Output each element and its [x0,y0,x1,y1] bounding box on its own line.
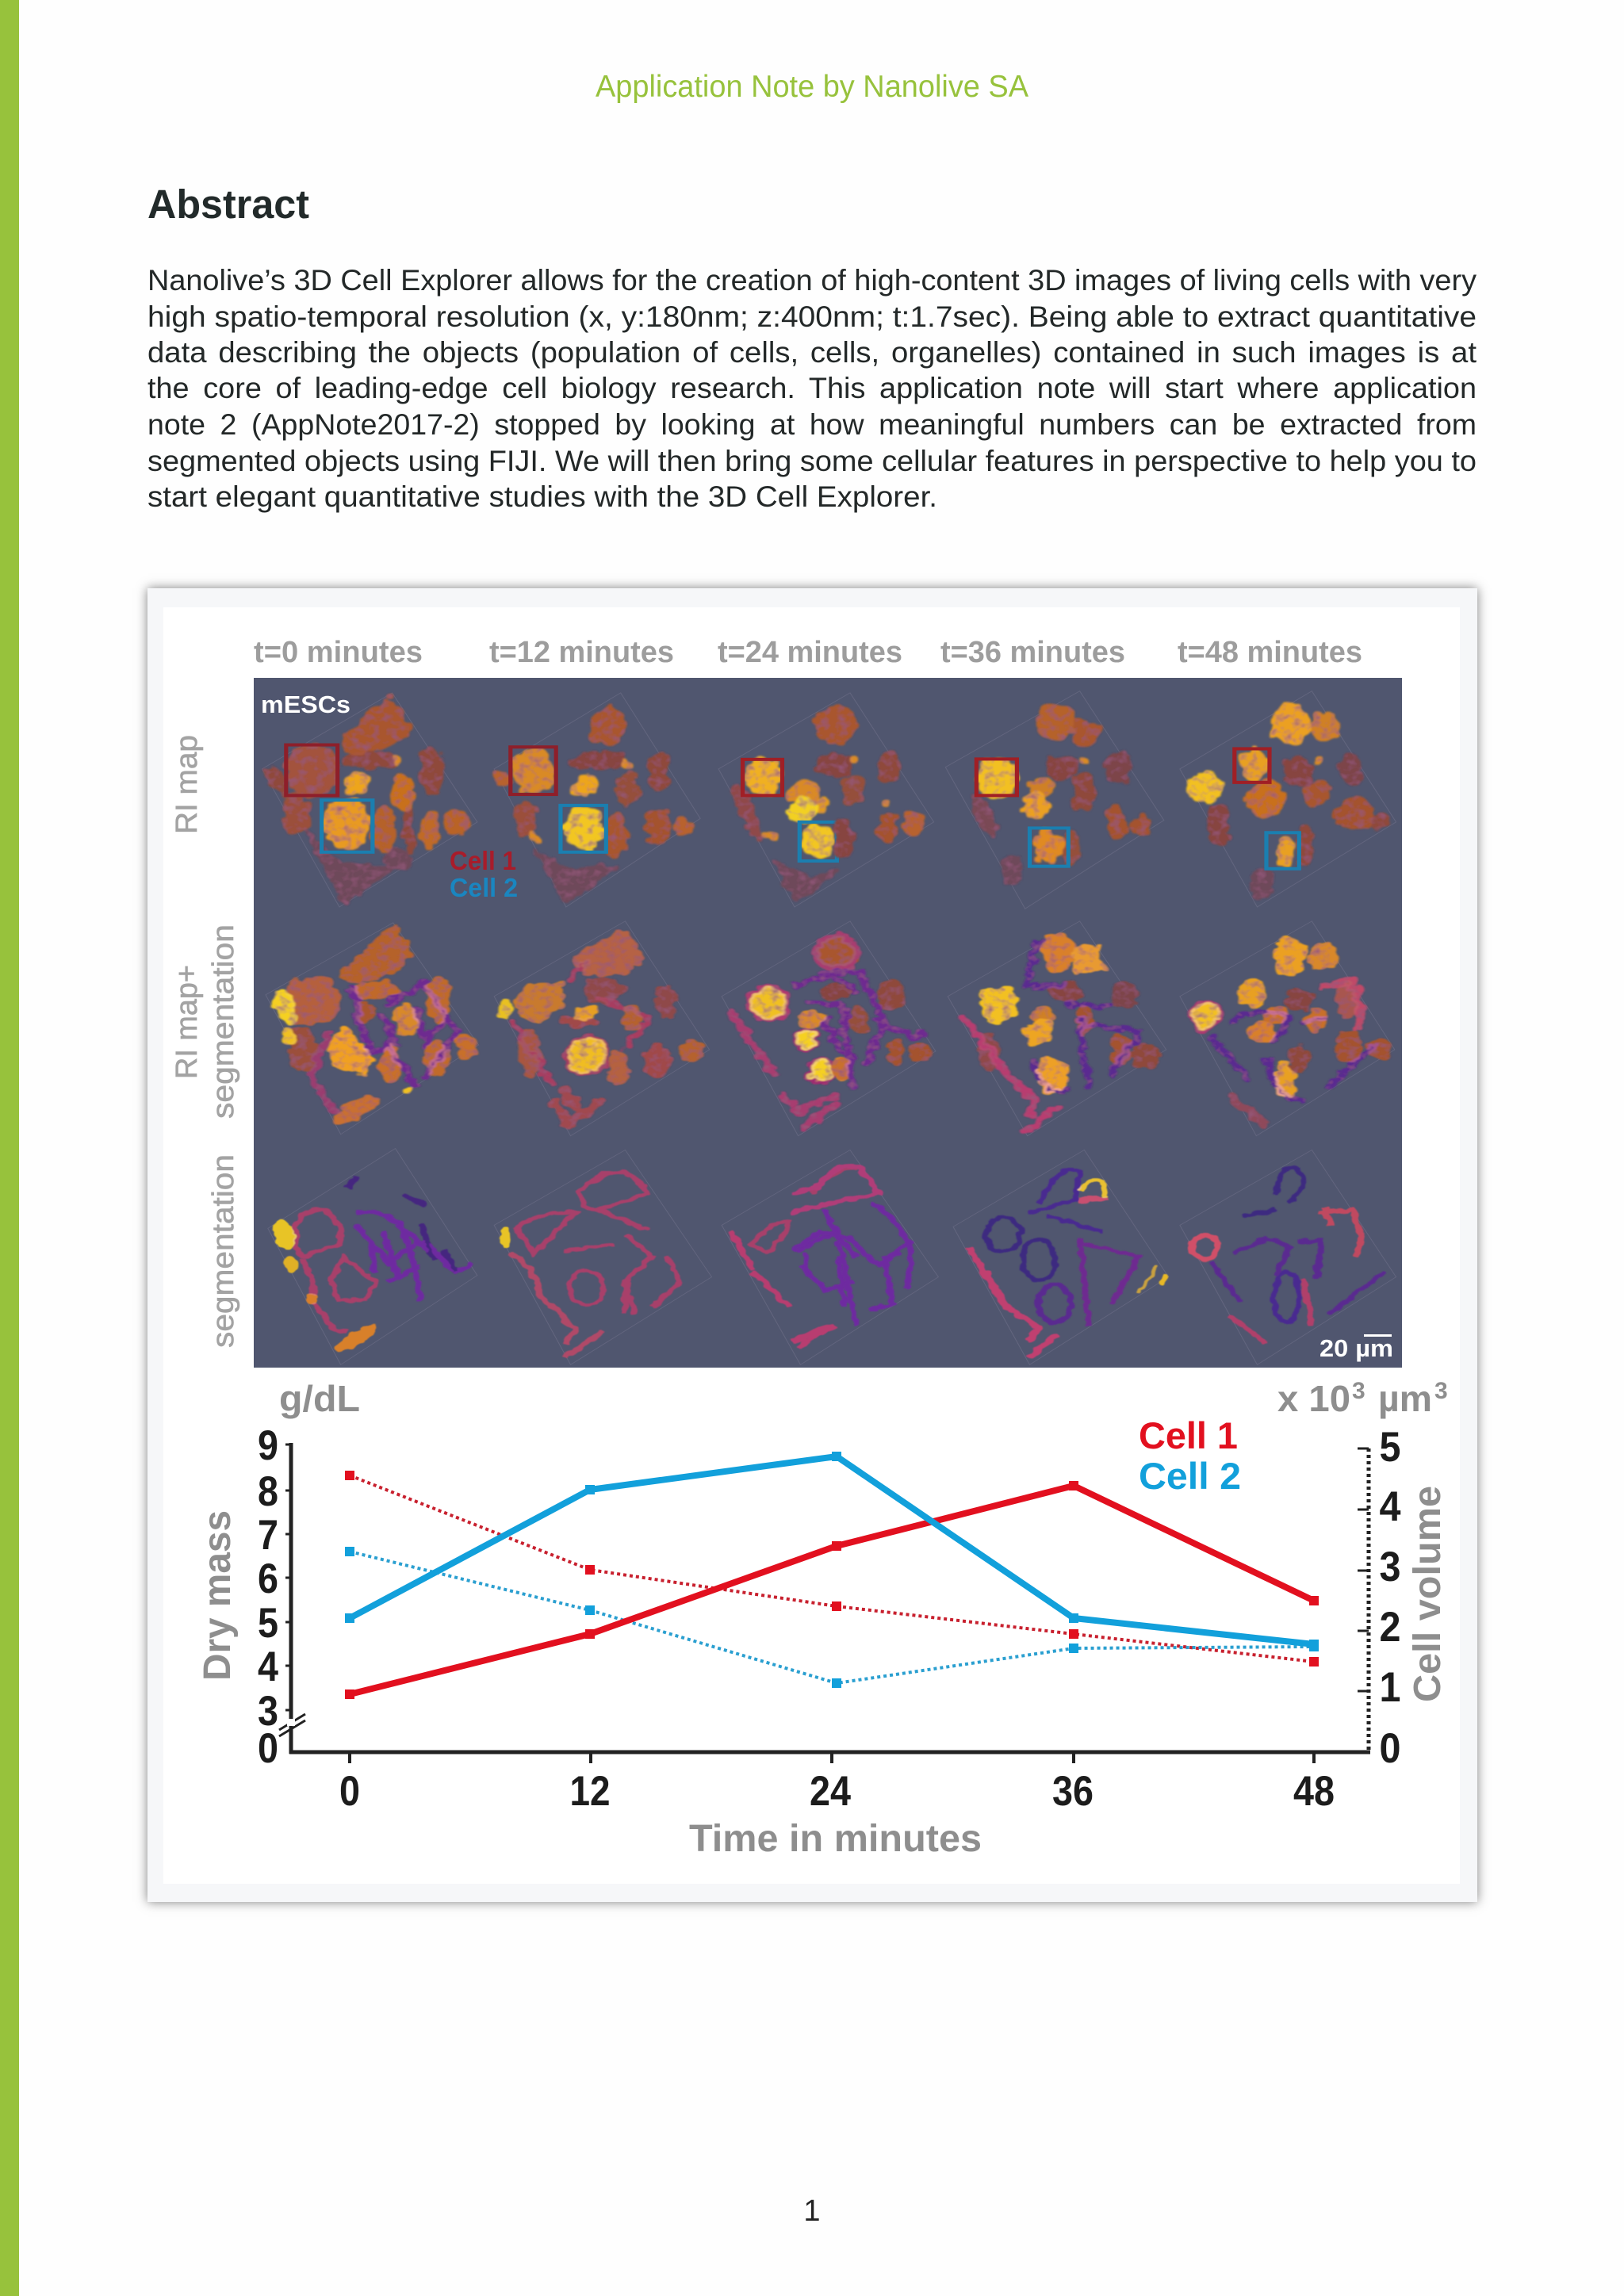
left axis numbers: 6 [258,1556,278,1602]
left axis title: Dry mass [197,1510,239,1681]
tile t=48 RI map [1180,691,1396,907]
right axis numbers: 4 [1380,1483,1401,1530]
column headings: t=36 minutes [940,636,1125,669]
x axis numbers: 48 [1293,1768,1335,1815]
tile t=24 segmentation [722,1150,938,1364]
row 2: RI map plus segmentation tiles [266,921,1395,1136]
tile t=12 segmentation [494,1150,712,1364]
left axis numbers: 8 [258,1468,278,1515]
scale bar: 20 µm [1320,1334,1393,1362]
chart legend: Cell 2 [1139,1455,1241,1497]
abstract body text: data describing the objects (population of cells, cells, organelles) contained in such images is at [147,336,1477,369]
abstract heading: Abstract [147,182,309,227]
column headings: t=24 minutes [718,636,902,669]
tile t=0 RI map [262,693,477,907]
row 1: RI map tiles [262,691,1396,909]
image legend: cell labels [450,846,518,902]
green side bar [0,0,19,2296]
left axis numbers: 7 [258,1512,278,1559]
left axis numbers: 4 [258,1644,278,1690]
line chart [197,1378,1449,1860]
right axis numbers: 0 [1380,1725,1400,1772]
chart legend [1139,1414,1241,1497]
abstract body text: high spatio-temporal resolution (x, y:180nm; z:400nm; t:1.7sec). Being able to extract quantitative [147,300,1477,333]
tile t=24 RI map plus segmentation [722,921,936,1136]
right axis title: Cell volume [1407,1486,1449,1702]
tile t=36 RI map plus segmentation [948,921,1166,1136]
series: cell 1 volume dotted [345,1471,1319,1667]
image legend: cell labels: Cell 2 [450,873,518,902]
left axis numbers: 3 [258,1688,278,1735]
tile t=24 RI map [718,693,934,907]
chart axes [279,1443,1370,1763]
row labels [170,735,240,1348]
tile t=0 segmentation [268,1149,477,1364]
right unit: 3 [1434,1378,1448,1404]
right axis numbers: 3 [1380,1544,1400,1590]
right axis numbers: 1 [1380,1664,1400,1711]
right unit: µm [1378,1378,1432,1419]
tile t=36 RI map [945,691,1164,909]
right axis numbers: 5 [1380,1424,1400,1471]
header line: Application Note by Nanolive SA [596,70,1028,104]
abstract body text: Nanolive’s 3D Cell Explorer allows for the creation of high-content 3D images of living cells with very [147,264,1477,297]
tile t=12 RI map [494,693,700,907]
left axis numbers: 0 [258,1725,278,1772]
x axis numbers: 24 [810,1768,851,1815]
image legend: cell labels: Cell 1 [450,846,516,875]
left axis numbers: 9 [258,1422,278,1469]
abstract body text: segmented objects using FIJI. We will then bring some cellular features in perspective to help you to [147,445,1477,477]
microscopy image panel background [254,678,1402,1368]
x axis numbers: 36 [1052,1768,1094,1815]
x axis numbers [339,1768,1335,1815]
series: cell 1 dry mass solid [345,1481,1319,1699]
tile t=12 RI map plus segmentation [494,921,710,1136]
left axis numbers [258,1422,278,1772]
series: cell 2 volume dotted [345,1547,1319,1688]
column headings: t=12 minutes [489,636,674,669]
chart legend: Cell 1 [1139,1414,1238,1456]
tile t=48 segmentation [1180,1150,1396,1364]
column headings: t=48 minutes [1178,636,1362,669]
x axis title: Time in minutes [689,1818,982,1860]
row labels: segmentation [207,924,240,1119]
figure card background [147,588,1477,1902]
column headings [254,636,1362,669]
series: cell 2 dry mass solid [345,1452,1319,1649]
left unit: g/dL [279,1378,360,1419]
left axis numbers: 5 [258,1600,278,1647]
abstract body text: note 2 (AppNote2017-2) stopped by looking at how meaningful numbers can be extracted from [147,408,1477,441]
tile t=36 segmentation [953,1150,1169,1364]
tile t=48 RI map plus segmentation [1180,921,1395,1136]
right unit: x 10 [1277,1378,1350,1419]
right unit: 3 [1352,1378,1365,1404]
x axis numbers: 0 [339,1768,360,1815]
right axis numbers: 2 [1380,1604,1400,1651]
abstract body text [147,264,1477,513]
x axis numbers: 12 [569,1768,611,1815]
row labels: RI map+ [170,965,204,1079]
column headings: t=0 minutes [254,636,423,669]
abstract body text: the core of leading-edge cell biology research. This application note will start where application [147,372,1477,404]
row labels: RI map [170,735,204,834]
image annotation: mESCs: mESCs [261,691,350,718]
page number: 1 [803,2195,821,2228]
tile t=0 RI map plus segmentation [266,923,479,1135]
row labels: segmentation [207,1154,240,1348]
abstract body text: start elegant quantitative studies with the 3D Cell Explorer. [147,480,937,513]
right axis numbers [1380,1424,1401,1772]
row 3: segmentation tiles [268,1149,1396,1364]
